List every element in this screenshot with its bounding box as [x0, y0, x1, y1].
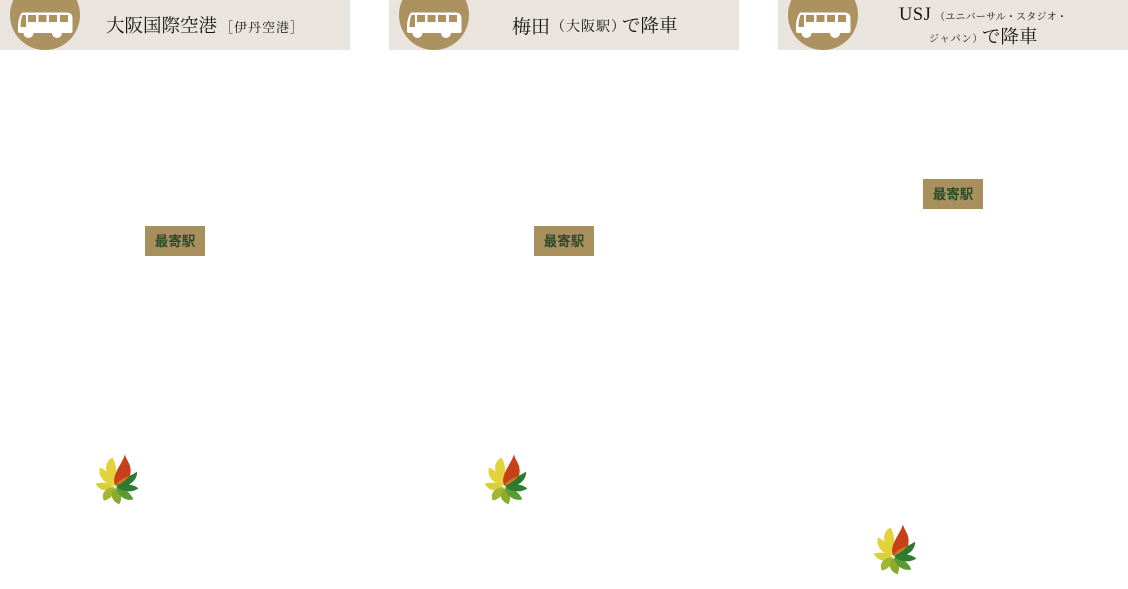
- heading note: Itami airport: ［伊丹空港］: [220, 20, 304, 35]
- heading: Umeda: 梅田: [512, 17, 550, 38]
- heading: Osaka airport: 大阪国際空港: [106, 17, 217, 37]
- badge: nearest station, airport: 最寄駅: [155, 234, 195, 249]
- icon: bus: [788, 0, 858, 50]
- badge: nearest station, airport: [145, 226, 205, 256]
- heading: get off: で降車: [622, 17, 678, 37]
- badge: nearest station, Umeda: 最寄駅: [544, 234, 584, 249]
- icon: leaf logo, Umeda: [484, 454, 528, 504]
- badge: nearest station, USJ: 最寄駅: [933, 187, 973, 202]
- badge: nearest station, USJ: [923, 179, 983, 209]
- heading note: Universal Studios: （ユニバーサル・スタジオ・: [935, 12, 1067, 23]
- heading: get off: で降車: [982, 28, 1038, 48]
- icon: bus: [399, 0, 469, 50]
- panel: Umeda header: [389, 0, 739, 50]
- heading note: Japan: ジャパン）: [929, 34, 983, 45]
- icon: leaf logo, USJ: [874, 524, 916, 574]
- panel: Osaka airport header: [0, 0, 350, 50]
- icon: bus: [10, 0, 80, 50]
- heading note: Osaka station: （大阪駅）: [551, 20, 626, 35]
- heading: USJ: USJ: [899, 5, 931, 25]
- badge: nearest station, Umeda: [534, 226, 594, 256]
- icon: leaf logo, airport: [96, 454, 138, 504]
- panel: USJ header: [778, 0, 1128, 50]
